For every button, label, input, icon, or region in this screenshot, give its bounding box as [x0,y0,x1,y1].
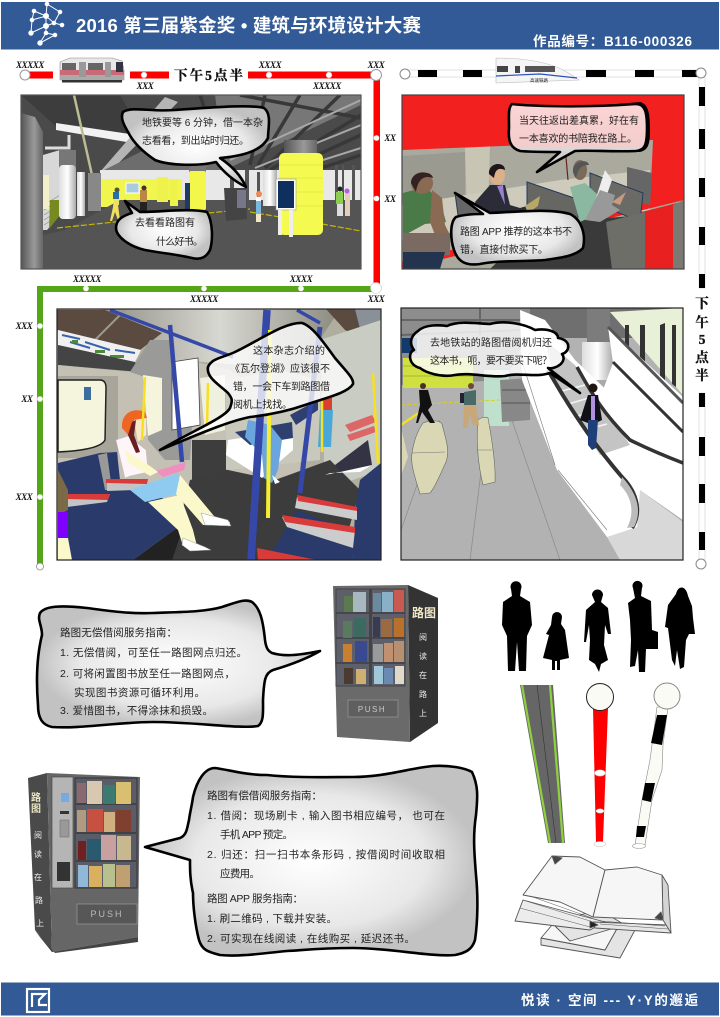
bubble: tired return trip: 当天往返出差真累，好在有 [519,114,639,127]
lower rail line segment [696,393,706,569]
comic panel 1: subway station [21,95,361,269]
vending machine: paid book kiosk: 上 [36,919,44,928]
near seats [353,463,381,560]
icon: stack of books [515,856,671,958]
station labels: green line: XX [20,394,34,404]
silhouette: girl in dress [543,612,569,670]
station labels: green line: XXX [15,492,34,502]
vending machine in scene [224,188,247,221]
bubble: station wait: 志看看，到出站时归还。 [142,134,249,147]
vending machine: paid book kiosk: PUSH [90,909,124,919]
icon: high speed train: 高速铁路 [530,77,548,84]
comic panel 2: high speed train interior [402,95,684,269]
bubble: tired return trip: 一本喜欢的书陪我在路上。 [519,132,637,145]
comic panel 3: metro carriage [57,309,381,560]
left bench [58,452,185,560]
bubble: see what books: 去看看路图有 [135,216,195,229]
callout: paid borrowing guide: 路图有偿借阅服务指南： [207,789,322,802]
doors [130,340,192,460]
callout: free borrowing guide: 3. 爱惜图书，不得涂抹和损毁。 [60,704,213,717]
vending machine: paid book kiosk: 路 [35,895,43,905]
callout: paid borrowing guide: 路图 APP 服务指南： [207,892,303,905]
far passengers [245,398,333,484]
vending machine: free book kiosk: 阅 [419,633,427,642]
seats [627,167,652,205]
bubble: Walden magazine [160,323,353,450]
bubble: app recommended: 错，直接付款买下。 [460,243,548,256]
callout: paid borrowing guide: 应费用。 [220,867,260,880]
bubble: return or buy: 这本书，呃，要不要买下呢？ [430,354,552,367]
middle passenger [475,164,540,215]
bubble: Walden magazine: 这本杂志介绍的 [253,344,325,357]
footer banner [1,982,719,1016]
station labels: green line: XXXXX [189,294,219,304]
icon: square spiral logo [27,989,49,1012]
handwritten time: horizontal: 下午5点半 [174,67,244,83]
bubble: return or buy: 去地铁站的路图借阅机归还 [430,336,552,349]
bubble: Walden magazine: 错，一会下车到路图借 [233,380,330,393]
column [587,308,610,342]
station labels: green line: XXXX [289,274,314,284]
right escalator [604,329,682,520]
bubble: app recommended: 路图 APP 推荐的这本书不 [460,225,572,238]
vending machine: paid book kiosk [28,773,140,953]
left wall and stairs [21,113,43,269]
vertical handwritten time: 5 [699,332,706,347]
vending machine: paid book kiosk: 读 [34,849,42,859]
bubble: tired return trip [509,102,650,172]
callout: paid borrowing guide: 2. 可实现在线阅读 , 在线购买 , 延迟还书。 [207,932,415,945]
window [58,376,118,458]
black and white rail line [400,68,706,288]
silhouette: woman with handbag [665,587,695,669]
line sample: green track [520,685,565,843]
far seats [226,435,293,478]
partial figure [58,470,72,560]
station labels: red line: XXXXX [15,60,45,70]
line sample: black and white track [632,683,680,848]
vertical handwritten time [695,296,710,383]
floor [21,200,361,269]
callout: free borrowing guide: 1. 无偿借阅，可至任一路图网点归还。 [60,646,247,659]
vending machine: free book kiosk: 上 [419,709,427,718]
title: 2016 第三届紫金奖 • 建筑与环境设计大赛 [76,15,421,36]
callout: free borrowing guide: 路图无偿借阅服务指南： [60,626,177,639]
red shell [402,95,684,205]
callout: free borrowing guide [37,601,320,727]
main escalator [520,310,683,537]
bubble: see what books: 什么好书。 [156,236,203,248]
line sample: red track [586,684,614,846]
silhouette: man in suit [502,581,532,671]
station labels: green line [15,274,386,502]
comic panel 4: station escalator [401,308,683,560]
callout: paid borrowing guide: 1. 刷二维码 , 下载并安装。 [207,912,337,925]
footer slogan: 悦读 · 空间 --- Y·Y的邂逅 [521,992,698,1008]
poles [110,310,378,560]
vending machine: paid book kiosk: 路 [31,791,41,804]
vertical handwritten time: 点 [695,349,710,365]
vending machine: paid book kiosk: 图 [31,803,41,815]
entry number: 作品编号：B116-000326 [533,33,692,49]
icon: network logo [29,2,64,45]
station labels: red line: XX [383,194,397,204]
station labels: red line: XXXX [258,60,283,70]
silhouettes of passengers [502,581,695,672]
vending machine: free book kiosk [333,585,438,742]
vending machine: paid book kiosk: 在 [34,872,42,882]
left passenger [403,172,450,269]
callout: free borrowing guide: 2. 可将闲置图书放至任一路图网点， [60,667,235,680]
station labels: red line: XXXXX [312,81,342,91]
icon: metro train [60,58,124,82]
bubble: Walden magazine: 《瓦尔登湖》应该很不 [230,362,330,375]
bubble: station wait: 地铁要等 6 分钟，借一本杂 [142,116,263,129]
info board [276,179,296,210]
bubble: see what books [116,201,212,259]
station labels: green line: XXX [15,321,34,331]
callout: paid borrowing guide: 手机 APP 预定。 [220,828,293,841]
station labels: green line: XXXXX [72,274,102,284]
bubble: Walden magazine: 阅机上找找。 [233,398,292,411]
yellow wall [403,358,473,388]
station labels: red line: XXX [136,81,155,91]
vertical handwritten time: 半 [695,367,709,383]
silhouette: man with briefcase [628,581,658,672]
icon: high speed train [496,58,579,84]
vertical handwritten time: 午 [695,314,709,330]
gates [412,421,448,494]
people [110,197,120,221]
silhouette: woman in dress [584,590,611,672]
bubble: station wait [122,106,269,187]
station labels: green line: XXX [367,294,386,304]
bubble: app recommended [451,193,584,264]
vending machine: free book kiosk: PUSH [358,705,386,714]
bubble: return or buy [410,322,580,393]
people [416,383,435,423]
red metro line [15,60,397,288]
woman reading [116,410,231,551]
ad strip [58,330,141,362]
floor [170,460,360,560]
callout: paid borrowing guide: 2. 归还：扫一扫书本条形码 , 按借阅时间收取相 [207,848,445,861]
vending machine: free book kiosk: 路 [419,689,427,699]
columns [157,177,168,202]
station labels: red line [15,60,397,204]
vending machine: paid book kiosk: 阅 [34,831,42,840]
right passenger with newspaper [570,160,626,222]
vending machine: free book kiosk: 在 [419,670,427,680]
callout: paid borrowing guide: 1. 借阅：现场刷卡 , 输入图书相应编号， 也可在 [207,809,445,822]
lower right floor [607,490,683,560]
vending machine: free book kiosk: 读 [419,651,427,661]
callout: paid borrowing guide [145,766,477,956]
header banner [1,2,719,50]
vertical handwritten time: 下 [695,296,709,311]
station labels: red line: XX [383,133,397,143]
vending machine: free book kiosk: 路图 [412,605,436,620]
callout: free borrowing guide: 实现图书资源可循环利用。 [74,686,205,699]
station labels: red line: XXX [367,60,386,70]
green metro line [15,274,386,570]
